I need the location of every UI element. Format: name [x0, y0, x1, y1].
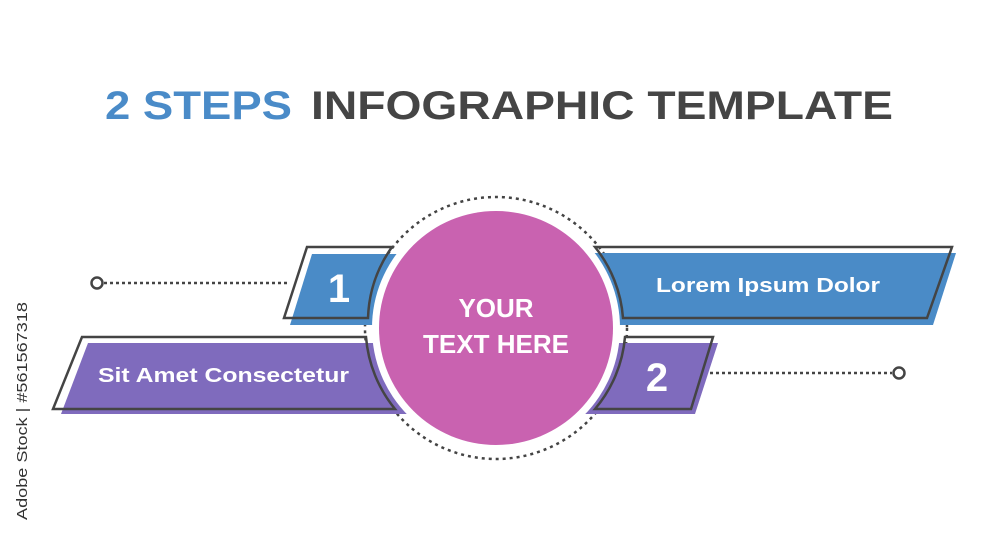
step 2 number: 2: [646, 356, 668, 400]
center circle: YOUR: [458, 293, 534, 323]
connector: step 2 dotted line: [710, 368, 904, 378]
white ring around center circle: [372, 204, 620, 452]
step 2 label: Sit Amet Consectetur: [98, 365, 349, 387]
bar fills: [61, 253, 956, 414]
center circle: [379, 211, 613, 445]
bar outlines: [53, 247, 952, 409]
title: INFOGRAPHIC TEMPLATE: [311, 84, 893, 128]
connector: step 1 dotted line: [92, 278, 290, 288]
center circle: TEXT HERE: [423, 329, 569, 359]
dotted circle: [365, 197, 627, 459]
title: 2 STEPS: [105, 84, 292, 128]
step 1 label: Lorem Ipsum Dolor: [656, 275, 880, 297]
title: [105, 84, 893, 128]
watermark side text: Adobe Stock | #561567318: [14, 302, 31, 520]
step 1 number: 1: [328, 267, 350, 311]
